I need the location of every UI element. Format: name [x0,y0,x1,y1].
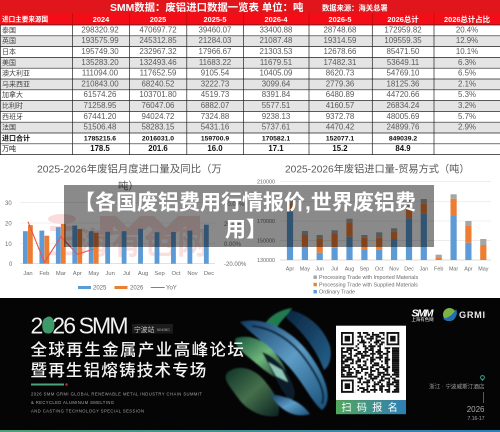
location: 浙江 · 宁波威斯汀酒店 [429,382,485,390]
column 2026 share: 6.5% [458,69,476,78]
month labels: Dec [404,266,414,272]
column 2025: 117652.59 [140,69,177,78]
month labels: Jul [123,271,130,277]
column 2026-4: 5737.61 [262,123,290,132]
column 2025-5: 3222.73 [201,79,230,88]
country names: 美国 [2,58,16,67]
column 2026-4: 9238.13 [262,112,291,121]
y axis labels: 40.00% [224,202,245,208]
country names: 澳大利亚 [2,69,30,78]
column 2026 total: 44720.66 [387,90,420,99]
column 2024: 135283.20 [81,58,119,67]
headline overlay [64,185,434,247]
headline overlay: 【各国废铝费用行情报价,世界废铝费 [74,190,416,214]
column 2024: 67441.20 [84,112,117,121]
country names: 西班牙 [2,112,23,121]
legend: YoY [166,286,177,292]
column 2025 [139,25,177,132]
country names [2,25,30,153]
ten-thousand-ton row: 201.6 [148,144,168,153]
column 2026 share [456,25,478,132]
country names: 法国 [2,123,16,132]
column 2026-5 [324,25,357,132]
badge: Ningbo: 宁波站 [134,325,155,334]
month labels: Sep [154,271,165,277]
panel: import volume by trade mode chart [257,162,491,296]
y axis labels: 30 [5,201,12,207]
table header row: 2026-5 [328,15,352,24]
month labels: Mar [449,266,458,272]
bars: 2026 [28,224,99,264]
table header row: 2025-5 [203,15,227,24]
month labels: Mar [56,271,66,277]
month labels: Sep [360,266,369,272]
column 2026-5: 6480.89 [326,90,355,99]
column 2025-5 [199,25,232,132]
ten-thousand-ton row [90,144,411,153]
month labels: Aug [345,266,354,272]
accent line [31,383,68,386]
country names: 加拿大 [2,90,23,99]
stacked bars: imported materials [287,194,486,257]
y axis labels: 20.00% [224,222,245,228]
icon: map pin [481,376,484,381]
month labels: Jan [419,266,428,272]
legend [314,275,418,296]
column 2024: 71258.95 [84,101,117,110]
column 2026-5: 2779.36 [326,79,355,88]
month labels: Oct [375,266,384,272]
y axis labels [257,180,275,264]
y axis labels: 130000 [257,258,275,264]
chart title: 2025-2026年废铝月度进口量及同比（万 [37,162,222,176]
legend: 2025 [93,286,107,292]
column 2025-5: 6882.07 [201,101,229,110]
country names: 泰国 [2,25,16,34]
country names: 日本 [2,47,16,56]
month labels: Feb [39,271,49,277]
month labels: Jun [315,266,324,272]
month labels: Aug [138,271,148,277]
month labels: Nov [389,266,399,272]
column 2026-5: 4470.42 [326,123,354,132]
month labels: Apr [73,271,82,277]
column 2024: 193575.99 [81,36,119,45]
column 2026 total: 109559.35 [384,36,422,45]
badge: Ningbo [132,324,173,334]
totals row: 849039.2 [389,135,417,142]
totals row: 2016031.0 [142,135,174,142]
column 2025-5: 7324.88 [201,112,230,121]
legend [78,286,177,292]
column 2025: 58283.15 [142,123,175,132]
month labels: Jun [106,271,115,277]
month labels: May [478,266,489,272]
heading line 1: 全球再生金属产业高峰论坛 [30,340,245,360]
y axis labels: 20 [5,222,12,228]
panel: monthly import volume and YoY chart [5,162,247,292]
stacked bars: ordinary trade [287,212,472,260]
column 2025: 68240.52 [142,79,174,88]
column 2026-4: 10405.09 [260,69,293,78]
column 2024: 61574.26 [84,90,117,99]
logo: SMM: SMM [412,308,434,320]
totals row: 1785215.6 [84,135,116,142]
month labels: May [300,266,310,272]
stacked bars: supplied materials [287,199,486,260]
table row stripes [0,36,500,133]
column 2025-5: 9105.54 [201,69,230,78]
month labels: Nov [187,271,198,277]
totals row: 159700.9 [201,135,229,142]
ten-thousand-ton row: 15.2 [332,144,348,153]
column 2026 total: 24899.76 [387,123,420,132]
badge: Ningbo: NINGBO [157,328,170,332]
column 2026-5: 17482.31 [324,58,356,67]
month labels: Feb [434,266,443,272]
event title: 2026 SMM: 2026 SMM [30,312,128,338]
ten-thousand-ton row: 84.9 [395,144,411,153]
column 2024: 51506.48 [84,123,117,132]
column 2026-4 [260,25,293,132]
month labels: Dec [204,271,214,277]
table title bar: 数据来源：海关总署 [322,4,388,12]
table header row: 2025 [150,15,166,24]
month labels: Jul [331,266,338,272]
legend: Processing Trade with Supplied Materials [319,282,418,288]
country names: 马来西亚 [2,80,30,88]
totals row [84,135,417,142]
location [429,376,485,390]
table header row: 2026总计 [387,15,419,24]
date: 7.16-17 [468,416,485,422]
y axis labels: 170000 [257,219,275,225]
column 2026 share: 20.4% [456,25,478,34]
y axis labels: 10 [5,242,12,248]
y axis labels: -20.00% [224,262,247,268]
column 2026 share: 12.9% [456,36,478,45]
y axis labels: 0 [9,262,13,268]
bottom gradient strip [0,430,500,432]
column 2024: 210843.00 [81,79,119,88]
panel: import data table [0,0,500,155]
column 2026-5: 19314.59 [324,36,357,45]
column 2026 total: 48005.69 [387,112,420,121]
month labels: Apr [286,266,294,272]
column 2024 [81,25,119,132]
column 2026 share: 5.3% [458,90,476,99]
button: scan to register [336,400,406,414]
column 2025: 232967.32 [139,47,177,56]
country names: 进口合计 [2,133,30,142]
ten-thousand-ton row: 16.0 [207,144,223,153]
column 2026 total: 85471.50 [387,47,420,56]
column 2026-5: 4160.57 [326,101,354,110]
column 2026 total [384,25,422,132]
illustration: metallic swirl [226,308,331,416]
column 2026-4: 11679.51 [260,58,292,67]
column 2024: 195749.30 [81,47,119,56]
column 2025-5: 11683.22 [199,58,231,67]
month labels: Oct [171,271,181,277]
column 2026-4: 5577.51 [262,101,290,110]
y axis labels [5,201,247,268]
chart title: 吨） [118,180,139,192]
english subtitle: 2026 SMM GRMI GLOBAL RENEWABLE METAL INDUSTRY CHAIN SUMMIT [31,392,202,396]
chart title: 2025-2026年废铝进口量-贸易方式（吨） [285,162,470,176]
column 2025: 470697.72 [139,25,177,34]
column 2025-5: 5431.16 [201,123,230,132]
country names: 万吨 [2,144,16,153]
month labels: Jan [23,271,33,277]
table header row: 2024 [93,15,110,24]
bars: 2025 [23,225,209,264]
column 2026 total: 18125.36 [387,79,420,88]
month labels [23,271,214,277]
column 2026-5: 28748.68 [324,25,357,34]
column 2024: 111094.00 [82,69,119,78]
qr code [336,326,406,400]
column 2024: 298320.92 [81,25,119,34]
ten-thousand-ton row: 17.1 [268,144,284,153]
y axis labels: 210000 [257,180,275,186]
english subtitle: & RECYCLED ALUMINUM SMELTING [31,400,114,405]
column 2026 share: 5.7% [458,112,476,121]
date: 2026 [467,405,485,414]
column 2025-5: 39460.07 [199,25,231,34]
heading line 2: 暨再生铝熔铸技术专场 [30,360,208,380]
column 2026-5: 12678.66 [324,47,357,56]
month labels: Apr [464,266,473,272]
column 2026-4: 33400.88 [260,25,293,34]
month labels [286,266,489,272]
country names: 比利时 [2,101,23,110]
table title bar [0,0,500,14]
table title bar: SMM数据：废铝进口数据一览表 单位：吨 [110,1,304,14]
totals row: 170582.1 [262,135,290,142]
column 2026-4: 21303.53 [260,47,293,56]
column 2025: 94024.72 [142,112,174,121]
column 2025-5: 17966.67 [199,47,231,56]
table header row: 2026总计占比 [444,15,491,24]
country names: 英国 [2,36,16,45]
column 2026-4: 8391.84 [262,90,291,99]
legend: 2026 [130,286,144,292]
logo: SMM: 上海有色网 [412,316,434,323]
column 2026-5: 8620.73 [326,69,355,78]
column 2026 total: 26834.24 [387,101,420,110]
column 2026-4: 3099.64 [262,79,291,88]
watermark: SMM logo: 上海有色网 [45,226,208,261]
column 2026 total: 54769.10 [387,69,420,78]
english subtitle: AND CASTING TECHNOLOGY SPECIAL SESSION [31,408,144,414]
column 2026 total: 172959.82 [384,25,422,34]
column 2026 share: 2.1% [458,79,476,88]
column 2025: 103701.80 [139,90,177,99]
table data rows [2,25,478,153]
chart title [37,162,222,192]
ten-thousand-ton row: 178.5 [90,144,110,153]
column 2026 share: 6.3% [458,58,476,67]
column 2026 share: 3.2% [458,101,476,110]
column 2025-5: 21284.03 [199,36,232,45]
english subtitle [31,392,202,414]
column 2025: 132493.46 [139,58,177,67]
column 2025-5: 4519.73 [201,90,230,99]
date [467,392,485,422]
column 2026-4: 21087.48 [260,36,293,45]
column 2026-5: 9372.78 [326,112,355,121]
month labels: May [88,271,99,277]
legend: Processing Trade with Imported Materials [319,275,418,281]
column 2025: 245312.85 [139,36,177,45]
logo: GRMI [443,308,485,321]
panel: summit banner [0,298,500,432]
table header row: 2026-4 [264,15,288,24]
logo: GRMI: GRMI [459,310,485,320]
column 2026 total: 53649.11 [387,58,419,67]
column 2026 share: 2.9% [458,123,476,132]
button: scan to register: 扫码报名 [342,401,403,414]
column 2026 share: 10.1% [456,47,478,56]
y axis labels: 150000 [257,238,275,244]
y axis labels: 0.00% [224,242,242,248]
legend: Ordinary Trade [319,290,355,296]
line: YoY [28,222,94,262]
totals row: 152077.1 [326,135,354,142]
table header row: 进口主要来源国 [2,14,49,24]
table header row [0,13,500,25]
headline overlay: 用】 [225,218,267,242]
column 2025: 76047.06 [142,101,175,110]
